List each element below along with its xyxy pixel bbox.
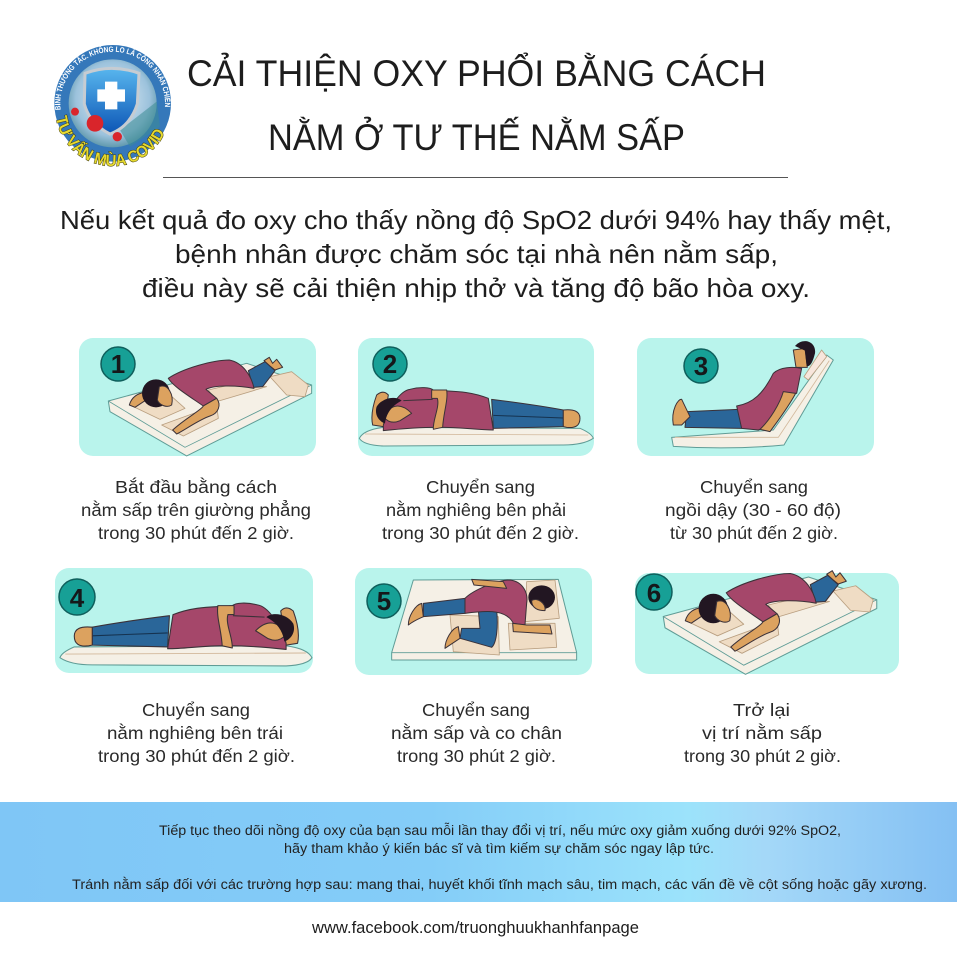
badge: number 3 (684, 349, 718, 383)
caption: step 5: nằm sấp và co chân (391, 722, 562, 743)
panel: warning note band (0, 802, 957, 902)
caption: step 1 (81, 476, 311, 543)
illustration: back to prone position (663, 571, 877, 674)
illustration: sitting up 30 to 60 degrees (672, 341, 833, 448)
panel: step 1 (79, 338, 316, 456)
caption: step 5: trong 30 phút 2 giờ. (397, 746, 556, 766)
text: monitoring advice: Tiếp tục theo dõi nồng độ oxy của bạn sau mỗi lần thay đổi vị trí, nếu mức oxy giảm xuống dưới 92% SpO2, (159, 823, 841, 838)
caption: step 3 (665, 477, 841, 543)
badge: number 5: 5 (377, 586, 391, 616)
caption: step 2: Chuyển sang (426, 477, 535, 497)
intro paragraph: Nếu kết quả đo oxy cho thấy nồng độ SpO2 dưới 94% hay thấy mệt, (60, 205, 892, 235)
intro paragraph: bệnh nhân được chăm sóc tại nhà nên nằm sấp, (175, 239, 778, 269)
caption: step 2 (382, 477, 579, 543)
caption: step 4: nằm nghiêng bên trái (107, 722, 283, 743)
icon: Tư vấn mùa Covid round logo (54, 45, 171, 167)
panel: step 2 (358, 338, 594, 456)
text: contraindications: Tránh nằm sấp đối với các trường hợp sau: mang thai, huyết khối tĩnh mạch sâu, tim mạch, các vấn đề về cột sống hoặc gãy xương. (72, 877, 927, 892)
caption: step 1: trong 30 phút đến 2 giờ. (98, 523, 294, 543)
text: monitoring advice: hãy tham khảo ý kiến bác sĩ và tìm kiếm sự chăm sóc ngay lập tức. (284, 841, 714, 856)
badge: number 6 (636, 574, 672, 610)
caption: step 3: ngồi dậy (30 - 60 độ) (665, 500, 841, 520)
caption: step 6: Trở lại (733, 700, 790, 720)
caption: step 4: trong 30 phút đến 2 giờ. (98, 746, 295, 766)
footer: page address: www.facebook.com/truonghuukhanhfanpage (311, 919, 639, 937)
illustration: lying on right side (359, 388, 593, 446)
badge: number 4: 4 (70, 583, 85, 613)
badge: number 1 (101, 347, 135, 381)
intro paragraph (60, 205, 892, 303)
title (187, 51, 766, 158)
caption: step 2: trong 30 phút đến 2 giờ. (382, 523, 579, 543)
caption: step 1: Bắt đầu bằng cách (115, 476, 277, 497)
title: CẢI THIỆN OXY PHỔI BẰNG CÁCH (187, 51, 766, 94)
icon: Tư vấn mùa Covid round logo: BÌNH THƯỜNG TẤC. KHÔNG LO LÀ CÔNG NHÂN CHIẾN THẮNG COVID (54, 46, 171, 110)
badge: number 3: 3 (694, 351, 708, 381)
panel: step 5 (355, 568, 592, 675)
illustration: prone with one knee bent (392, 579, 577, 660)
badge: number 4 (59, 579, 95, 615)
caption: step 3: từ 30 phút đến 2 giờ. (670, 523, 838, 543)
badge: number 2: 2 (383, 349, 397, 379)
illustration: lying prone on flat bed (108, 357, 312, 456)
caption: step 5: Chuyển sang (422, 700, 530, 720)
caption: step 3: Chuyển sang (700, 477, 808, 497)
badge: number 5 (367, 584, 401, 618)
caption: step 5 (391, 700, 562, 766)
panel: step 6 (635, 571, 899, 674)
badge: number 1: 1 (111, 349, 125, 379)
caption: step 2: nằm nghiêng bên phải (386, 499, 566, 520)
caption: step 6 (684, 700, 841, 766)
caption: step 1: nằm sấp trên giường phẳng (81, 499, 311, 520)
icon: Tư vấn mùa Covid round logo: TƯ VẤN MÙA COVID (56, 114, 164, 167)
illustration: lying on left side (60, 603, 312, 666)
panel: step 4 (55, 568, 313, 673)
caption: step 4 (98, 700, 295, 766)
panel: step 3 (637, 338, 874, 456)
caption: step 4: Chuyển sang (142, 700, 250, 720)
caption: step 6: trong 30 phút 2 giờ. (684, 746, 841, 766)
text: monitoring advice (159, 823, 841, 856)
badge: number 2 (373, 347, 407, 381)
badge: number 6: 6 (647, 578, 661, 608)
caption: step 6: vị trí nằm sấp (702, 722, 822, 743)
intro paragraph: điều này sẽ cải thiện nhịp thở và tăng độ bão hòa oxy. (142, 273, 810, 303)
title: NẰM Ở TƯ THẾ NẰM SẤP (268, 116, 685, 158)
